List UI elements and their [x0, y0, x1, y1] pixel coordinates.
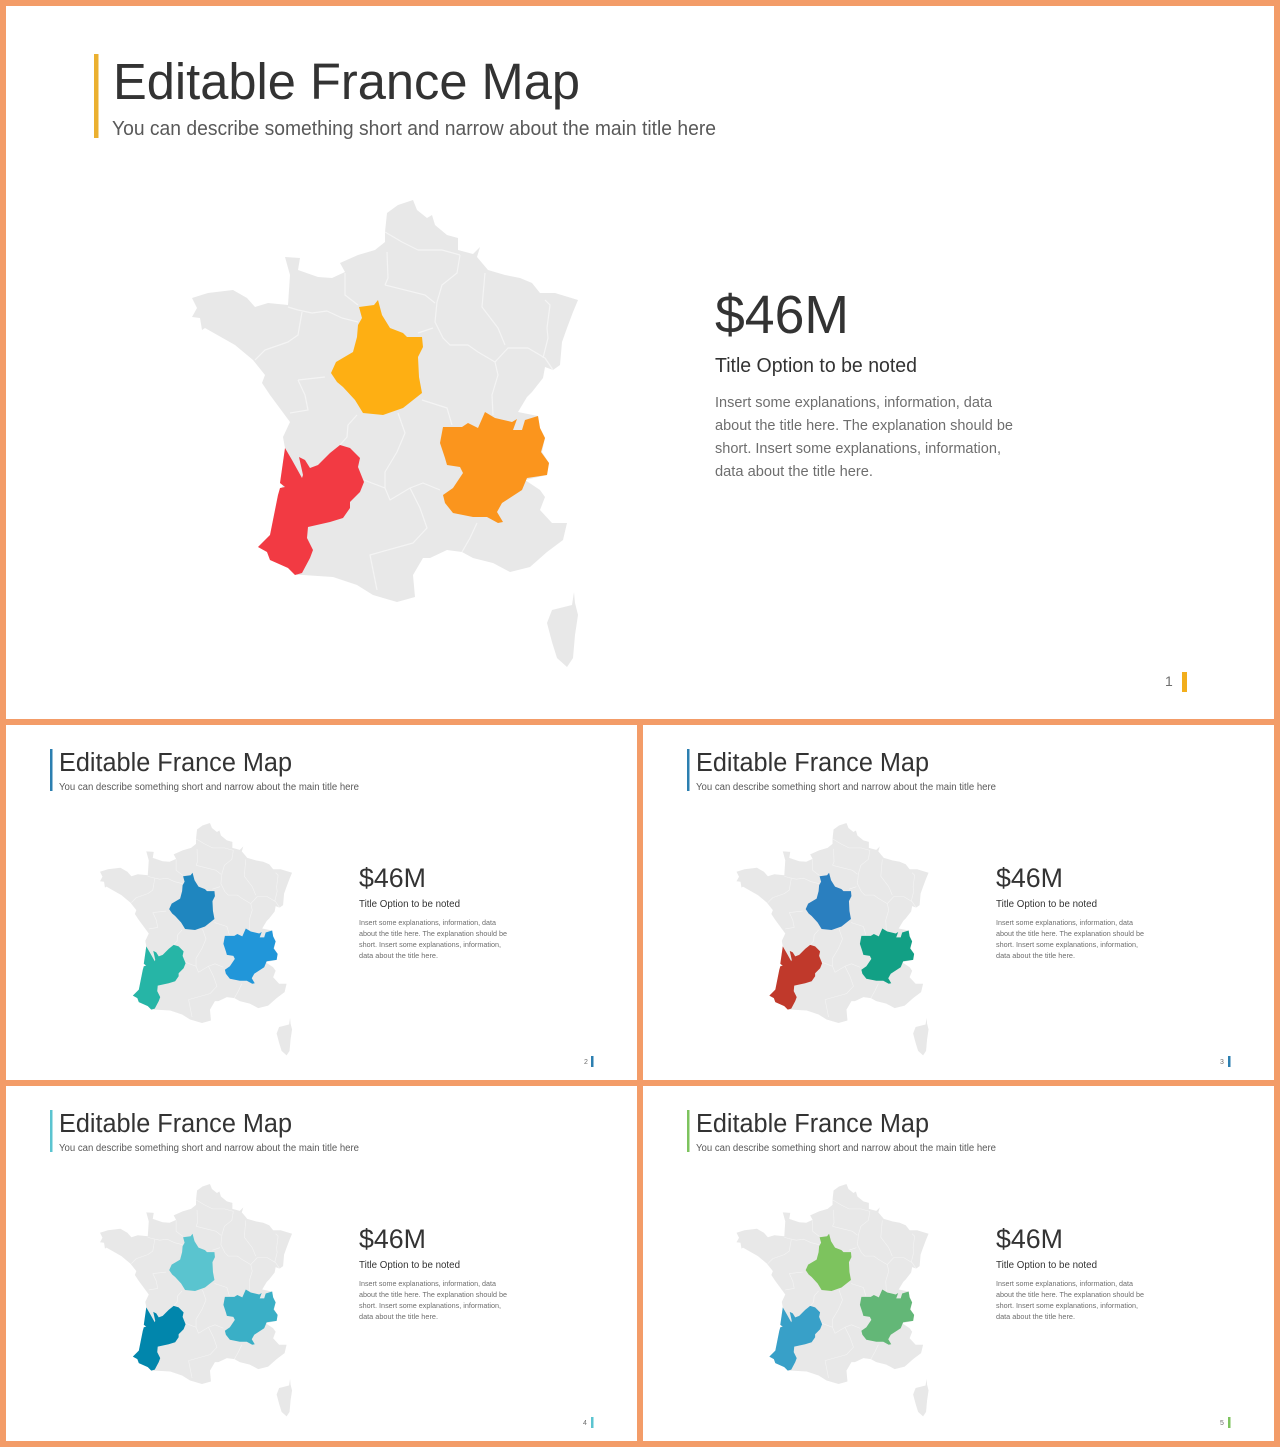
option title: Title Option to be noted: [715, 355, 917, 377]
page number: 2: [584, 1059, 588, 1066]
body text: data about the title here.: [715, 463, 873, 480]
panel: slide 3: [643, 725, 1274, 1080]
title accent bar: [94, 54, 98, 138]
page number: 3: [1220, 1059, 1224, 1066]
map of France: [192, 200, 578, 667]
page number: [1220, 1417, 1230, 1428]
title accent bar: [687, 1110, 690, 1152]
big number: $46M: [996, 863, 1063, 893]
panel: slide 5: [643, 1086, 1274, 1441]
body text: short. Insert some explanations, information,: [715, 440, 1001, 457]
body text: short. Insert some explanations, information,: [359, 940, 501, 949]
title: Editable France Map: [696, 1110, 929, 1138]
body text: data about the title here.: [359, 1312, 438, 1321]
title: Editable France Map: [113, 53, 580, 110]
big number: $46M: [359, 1224, 426, 1254]
option title: Title Option to be noted: [996, 899, 1097, 910]
body text: about the title here. The explanation should be: [359, 929, 507, 938]
title accent bar: [50, 749, 52, 791]
title: Editable France Map: [696, 749, 929, 777]
body text: short. Insert some explanations, information,: [996, 940, 1138, 949]
page number: 4: [583, 1420, 587, 1427]
option title: Title Option to be noted: [359, 1260, 460, 1271]
panel: slide 1: [6, 6, 1274, 719]
title: Editable France Map: [59, 749, 292, 777]
big number: $46M: [996, 1224, 1063, 1254]
body text: about the title here. The explanation should be: [715, 417, 1013, 434]
body text: data about the title here.: [996, 951, 1075, 960]
body text: short. Insert some explanations, information,: [359, 1301, 501, 1310]
page number: [1220, 1056, 1230, 1067]
option title: Title Option to be noted: [996, 1260, 1097, 1271]
body text: data about the title here.: [359, 951, 438, 960]
body text: about the title here. The explanation should be: [996, 1290, 1144, 1299]
map of France: [737, 1184, 929, 1416]
page number: 5: [1220, 1420, 1224, 1427]
body text: Insert some explanations, information, data: [715, 394, 993, 411]
body text: [715, 394, 1013, 480]
body text: Insert some explanations, information, data: [996, 1279, 1134, 1288]
subtitle: You can describe something short and narrow about the main title here: [112, 118, 716, 140]
title accent bar: [687, 749, 690, 791]
body text: [359, 918, 507, 960]
body text: about the title here. The explanation should be: [996, 929, 1144, 938]
subtitle: You can describe something short and narrow about the main title here: [696, 782, 996, 793]
map of France: [100, 1184, 292, 1416]
body text: Insert some explanations, information, data: [996, 918, 1134, 927]
map of France: [100, 823, 292, 1055]
body text: about the title here. The explanation should be: [359, 1290, 507, 1299]
subtitle: You can describe something short and narrow about the main title here: [59, 1143, 359, 1154]
body text: [996, 918, 1144, 960]
title accent bar: [50, 1110, 52, 1152]
map of France: [737, 823, 929, 1055]
page number: [583, 1417, 594, 1428]
option title: Title Option to be noted: [359, 899, 460, 910]
subtitle: You can describe something short and narrow about the main title here: [696, 1143, 996, 1154]
body text: data about the title here.: [996, 1312, 1075, 1321]
big number: $46M: [359, 863, 426, 893]
subtitle: You can describe something short and narrow about the main title here: [59, 782, 359, 793]
page number: [584, 1056, 594, 1067]
body text: short. Insert some explanations, information,: [996, 1301, 1138, 1310]
page number: [1165, 672, 1187, 692]
big number: $46M: [715, 285, 849, 345]
panel: slide 4: [6, 1086, 637, 1441]
body text: [359, 1279, 507, 1321]
body text: Insert some explanations, information, data: [359, 1279, 497, 1288]
body text: [996, 1279, 1144, 1321]
page number: 1: [1165, 673, 1173, 689]
body text: Insert some explanations, information, data: [359, 918, 497, 927]
title: Editable France Map: [59, 1110, 292, 1138]
panel: slide 2: [6, 725, 637, 1080]
